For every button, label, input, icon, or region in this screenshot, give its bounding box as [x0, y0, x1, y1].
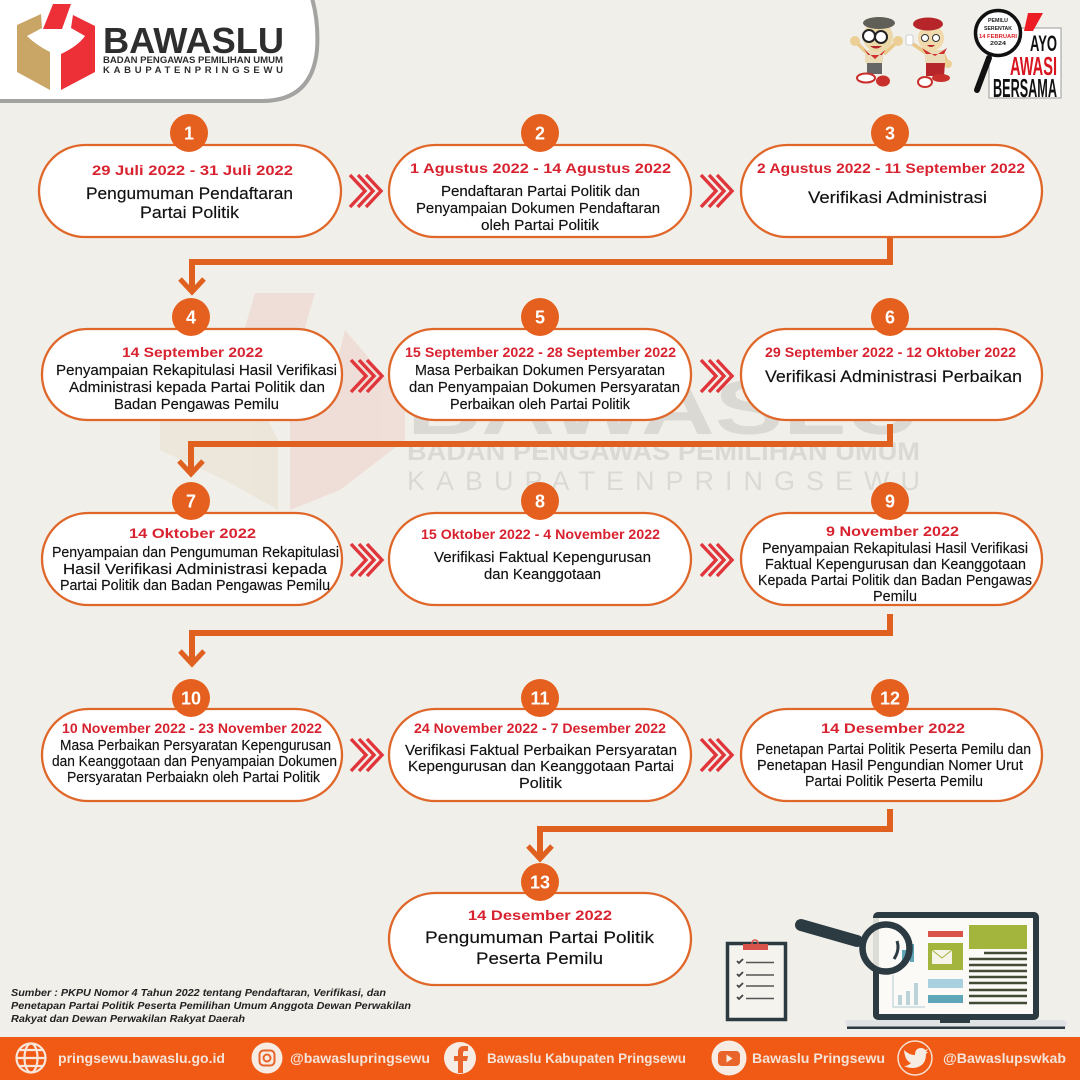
header panel with Bawaslu logo [0, 0, 317, 101]
campaign logo: Ayo Awasi Bersama: PEMILU [988, 18, 1008, 24]
footer bar: @bawaslupringsewu [290, 1051, 430, 1066]
step 9: 9 [885, 492, 895, 512]
step 5: Perbaikan oleh Partai Politik [450, 397, 631, 413]
arrow: 8 to 9 [701, 544, 732, 576]
step 11: 11 [530, 688, 550, 708]
arrow: 1 to 2 [350, 175, 381, 207]
step 11: Kepengurusan dan Keanggotaan Partai [408, 759, 674, 775]
icon: globe [16, 1044, 46, 1072]
step 4: 4 [186, 308, 196, 328]
step 11: 24 November 2022 - 7 Desember 2022 [414, 720, 666, 736]
step 6: 6 [885, 308, 895, 328]
step 4: Penyampaian Rekapitulasi Hasil Verifikasi [56, 363, 337, 379]
arrow: 7 to 8 [351, 544, 382, 576]
arrow: 11 to 12 [701, 739, 732, 771]
connector: step 3 to step 4 [180, 237, 890, 292]
connector: step 9 to step 10 [180, 614, 890, 664]
icon: facebook [444, 1042, 476, 1074]
step 13 [389, 863, 691, 985]
step 10: Masa Perbaikan Persyaratan Kepengurusan [60, 738, 331, 754]
step 4: 14 September 2022 [122, 344, 263, 360]
step 8 [389, 482, 691, 605]
step 8: 8 [535, 492, 545, 512]
header panel with Bawaslu logo: KABUPATENPRINGSEWU [103, 65, 283, 76]
step 7: Partai Politik dan Badan Pengawas Pemilu [60, 578, 330, 594]
step 9: 9 November 2022 [826, 523, 959, 539]
step 5 [389, 298, 691, 420]
step 6: 29 September 2022 - 12 Oktober 2022 [765, 344, 1016, 360]
step 9: Penyampaian Rekapitulasi Hasil Verifikasi [762, 541, 1028, 557]
watermark: Bawaslu logo and wordmark: KABUPATENPRINGSEWU [407, 466, 920, 496]
step 1: 1 [184, 124, 194, 144]
footer bar [0, 1037, 1080, 1080]
campaign logo: Ayo Awasi Bersama: 14 FEBRUARI [979, 34, 1017, 40]
source note [11, 988, 411, 1025]
step 6 [741, 298, 1042, 420]
step 5: dan Penyampaian Dokumen Persyaratan [409, 380, 680, 396]
wordmark: BAWASLU [103, 20, 284, 61]
step 7: 14 Oktober 2022 [129, 525, 256, 541]
campaign logo: Ayo Awasi Bersama [976, 10, 1061, 103]
header panel with Bawaslu logo: BADAN PENGAWAS PEMILIHAN UMUM [103, 55, 283, 66]
step 6: Verifikasi Administrasi Perbaikan [765, 367, 1022, 386]
step 13: 13 [530, 872, 550, 892]
step 2 [389, 114, 691, 237]
connector: step 6 to step 7 [179, 424, 890, 474]
campaign logo: Ayo Awasi Bersama: SERENTAK [984, 26, 1012, 32]
step 2: 2 [535, 124, 545, 144]
step 11: Verifikasi Faktual Perbaikan Persyaratan [405, 743, 677, 759]
step 5: 5 [535, 308, 545, 328]
arrow: 5 to 6 [701, 360, 732, 392]
step 2: oleh Partai Politik [481, 218, 600, 234]
step 13: 14 Desember 2022 [468, 907, 612, 923]
step 4 [42, 298, 342, 420]
step 13: Peserta Pemilu [476, 949, 603, 968]
step 10 [42, 679, 342, 801]
step 9: Pemilu [873, 589, 917, 605]
footer bar: pringsewu.bawaslu.go.id [58, 1051, 225, 1066]
watermark: Bawaslu logo and wordmark: BADAN PENGAWAS PEMILIHAN UMUM [407, 438, 920, 466]
step 12: Penetapan Partai Politik Peserta Pemilu dan [756, 742, 1031, 758]
arrow: 10 to 11 [351, 739, 382, 771]
step 10: dan Keanggotaan dan Penyampaian Dokumen [52, 754, 337, 770]
step 3 [741, 114, 1042, 237]
step 4: Administrasi kepada Partai Politik dan [69, 380, 325, 396]
step 2: Penyampaian Dokumen Pendaftaran [416, 201, 660, 217]
step 3: 2 Agustus 2022 - 11 September 2022 [757, 160, 1025, 176]
arrow: 4 to 5 [351, 360, 382, 392]
step 8: 15 Oktober 2022 - 4 November 2022 [421, 526, 660, 542]
icon: instagram [252, 1042, 282, 1074]
step 1: Pengumuman Pendaftaran [86, 184, 293, 203]
step 8: Verifikasi Faktual Kepengurusan [434, 550, 651, 566]
step 1: 29 Juli 2022 - 31 Juli 2022 [92, 162, 293, 178]
step 7: Penyampaian dan Pengumuman Rekapitulasi [52, 545, 339, 561]
source note: Penetapan Partai Politik Peserta Pemilihan Umum Anggota Dewan Perwakilan [11, 1001, 411, 1012]
step 9 [741, 482, 1042, 605]
step 5: 15 September 2022 - 28 September 2022 [405, 344, 676, 360]
step 8: dan Keanggotaan [484, 567, 601, 583]
campaign logo: Ayo Awasi Bersama: 2024 [990, 41, 1007, 47]
campaign logo: Ayo Awasi Bersama: AYO [1030, 31, 1057, 56]
step 12: Penetapan Hasil Pengundian Nomer Urut [757, 758, 1023, 774]
step 11: Politik [519, 776, 563, 792]
step 10: 10 November 2022 - 23 November 2022 [62, 720, 322, 736]
step 5: Masa Perbaikan Dokumen Persyaratan [415, 363, 665, 379]
step 12: Partai Politik Peserta Pemilu [805, 774, 983, 790]
arrow: 2 to 3 [701, 175, 732, 207]
connector: step 12 to step 13 [528, 809, 890, 859]
step 7: Hasil Verifikasi Administrasi kepada [63, 562, 327, 578]
step 4: Badan Pengawas Pemilu [114, 397, 279, 413]
step 12: 12 [880, 688, 900, 708]
source note: Rakyat dan Dewan Perwakilan Rakyat Daerah [11, 1014, 245, 1025]
watermark: Bawaslu logo and wordmark [160, 293, 920, 510]
icon: youtube [712, 1040, 746, 1076]
icon: twitter [898, 1041, 932, 1075]
step 2: 1 Agustus 2022 - 14 Agustus 2022 [410, 160, 671, 176]
step 10: Persyaratan Perbaiakn oleh Partai Politik [67, 770, 321, 786]
footer bar: Bawaslu Kabupaten Pringsewu [487, 1051, 686, 1066]
mascot: boy [850, 17, 903, 86]
step 3: 3 [885, 124, 895, 144]
watermark: Bawaslu logo and wordmark: BAWASLU [407, 366, 920, 451]
step 9: Kepada Partai Politik dan Badan Pengawas [758, 573, 1032, 589]
step 3: Verifikasi Administrasi [808, 188, 987, 207]
step 12: 14 Desember 2022 [821, 720, 965, 736]
source note: Sumber : PKPU Nomor 4 Tahun 2022 tentang Pendaftaran, Verifikasi, dan [11, 988, 386, 999]
step 9: Faktual Kepengurusan dan Keanggotaan [765, 557, 1026, 573]
step 10: 10 [181, 688, 201, 708]
logo: ballot box mark [17, 4, 95, 90]
step 13: Pengumuman Partai Politik [425, 928, 655, 947]
step 12 [741, 679, 1042, 801]
footer bar: Bawaslu Pringsewu [752, 1051, 885, 1066]
footer bar: @Bawaslupswkab [943, 1051, 1066, 1066]
step 2: Pendaftaran Partai Politik dan [441, 184, 640, 200]
step 1 [39, 114, 341, 237]
icon: clipboard checklist [728, 940, 786, 1020]
step 1: Partai Politik [140, 203, 240, 222]
mascot: girl [906, 18, 952, 87]
icon: laptop with report and magnifier [801, 915, 1067, 1029]
step 7 [42, 482, 342, 605]
step 7: 7 [186, 492, 196, 512]
step 11 [389, 679, 691, 801]
